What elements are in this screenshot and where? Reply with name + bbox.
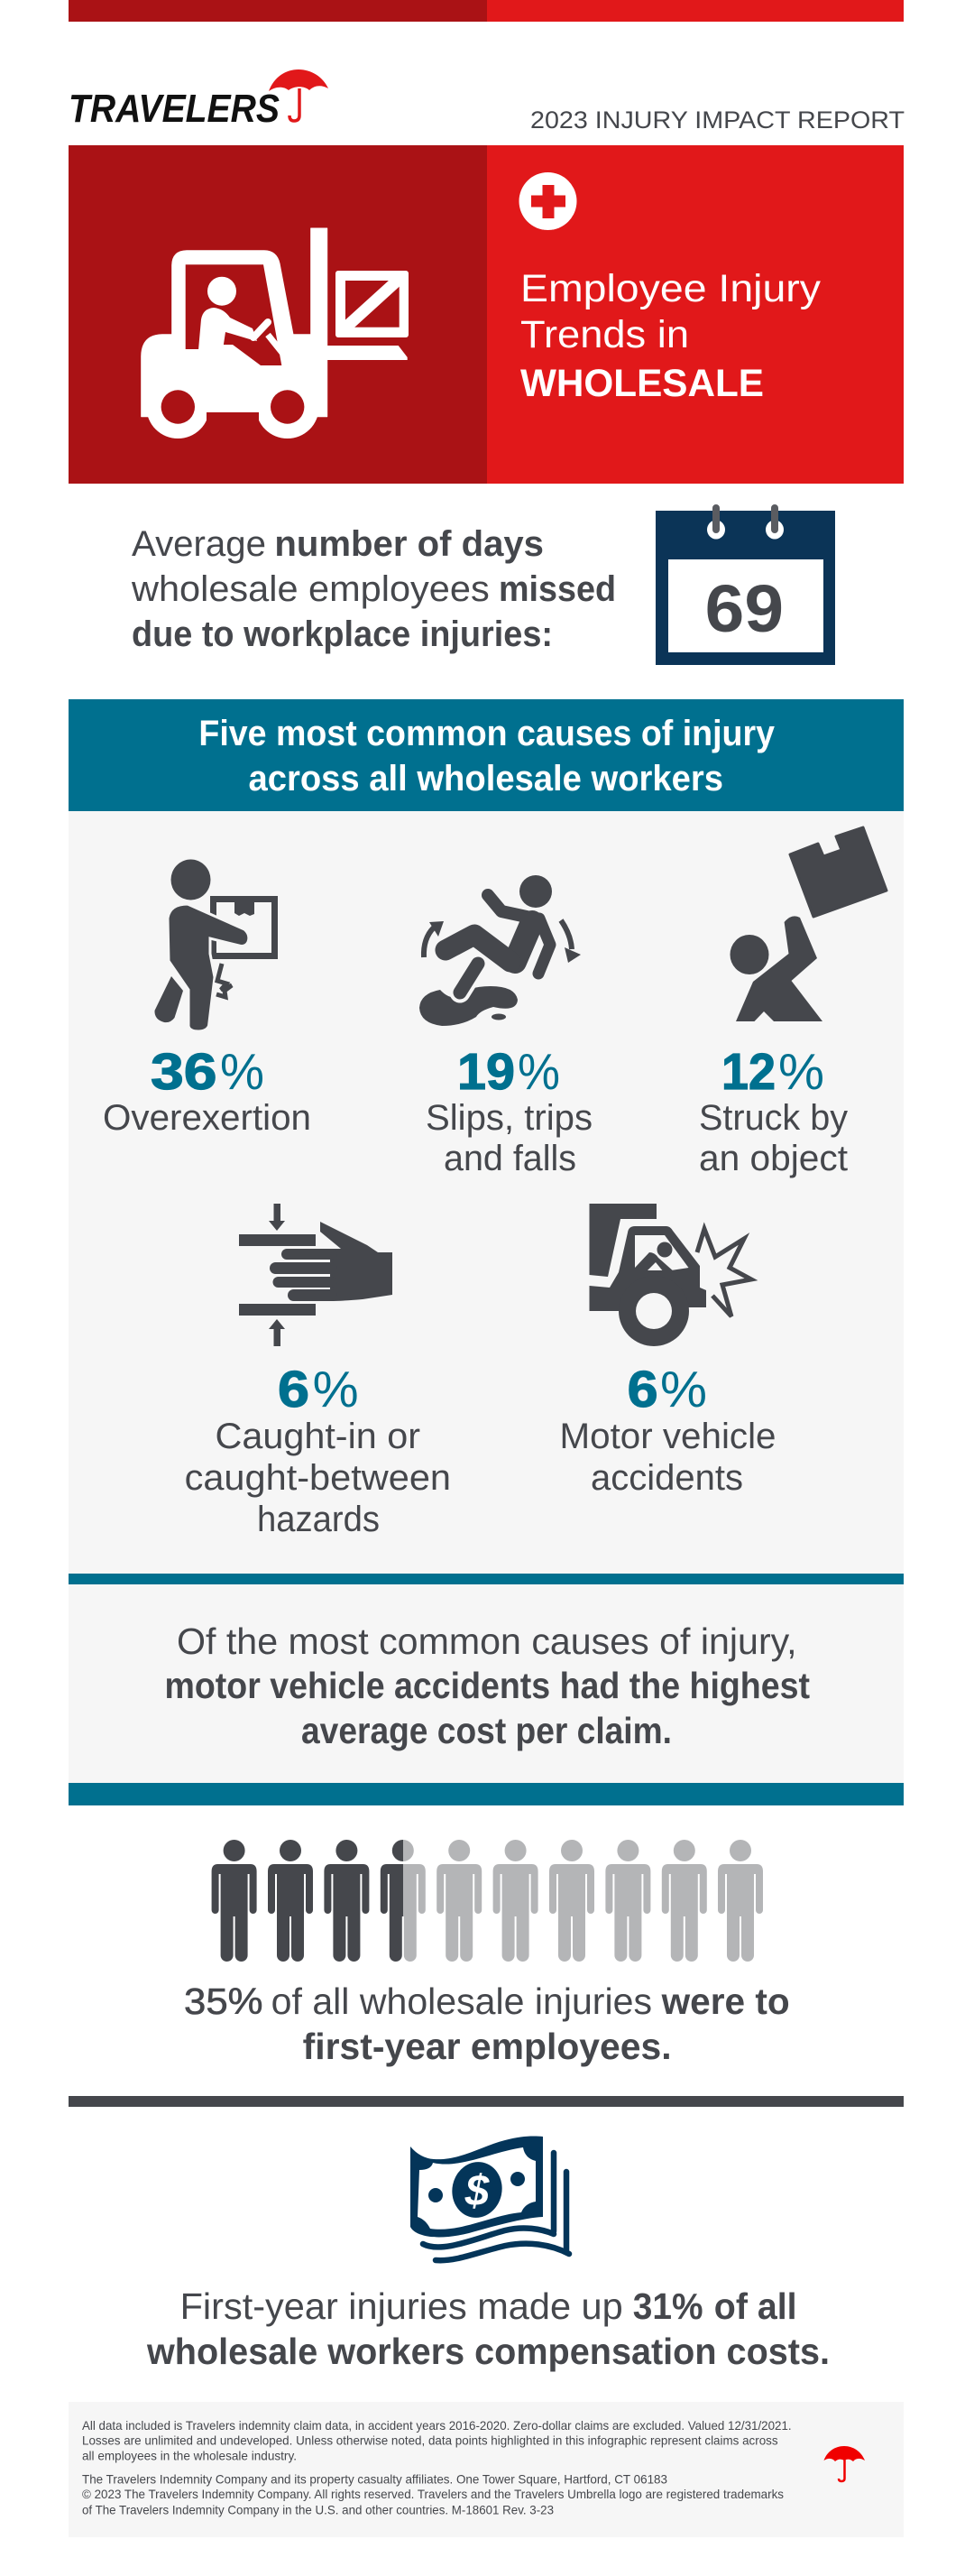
- first-year injury statement: [184, 1980, 790, 2067]
- icon: motor vehicle accident: [590, 1204, 751, 1346]
- person 10: [718, 1840, 763, 1962]
- person 9: [662, 1840, 707, 1962]
- stat: overexertion: 36: [151, 1043, 217, 1101]
- panel heading: Five most common causes of injury: [198, 714, 776, 753]
- stat: overexertion: %: [220, 1043, 264, 1101]
- stat: slips, trips and falls: 19: [457, 1043, 515, 1101]
- disclaimer text: all employees in the wholesale industry.: [82, 2449, 297, 2463]
- stat: overexertion: [103, 1043, 311, 1138]
- icon: slips, trips and falls: [419, 875, 581, 1026]
- stat: motor vehicle accidents: Motor vehicle: [559, 1417, 776, 1456]
- hero panel: [69, 145, 904, 484]
- person 8: [605, 1840, 650, 1962]
- compensation cost statement: of all: [714, 2285, 797, 2327]
- stat: struck by an object: [699, 1043, 848, 1178]
- panel heading: [69, 699, 904, 811]
- hero title: [520, 267, 822, 405]
- icon: red umbrella: [824, 2446, 865, 2481]
- first-year injury statement: were to: [661, 1980, 790, 2022]
- callout text: Of the most common causes of injury,: [177, 1620, 797, 1662]
- stat text: days missed: missed: [499, 569, 616, 609]
- disclaimer text: Losses are unlimited and undeveloped. Unless otherwise noted, data points highlighted in this infographic represent claims across: [82, 2433, 778, 2447]
- panel: highest average cost callout: [69, 1574, 904, 1805]
- report label: 2023 INJURY IMPACT REPORT: [530, 106, 905, 134]
- icon: forklift: [142, 228, 409, 439]
- top colour bar: [69, 0, 904, 22]
- compensation cost statement: First-year injuries made up: [180, 2285, 623, 2327]
- first-year injury statement: of all wholesale injuries: [271, 1980, 652, 2022]
- stat: caught-in hazards: 6: [278, 1361, 309, 1418]
- stat: slips, trips and falls: Slips, trips: [426, 1098, 593, 1138]
- stat: overexertion: Overexertion: [103, 1098, 311, 1138]
- icon: medical cross: [519, 172, 577, 230]
- icon: calendar 69: [656, 508, 835, 665]
- panel: five most common causes: [69, 699, 904, 1574]
- hero title: Trends in: [520, 313, 689, 356]
- divider bar: [69, 2096, 904, 2107]
- disclaimer text: [82, 2418, 792, 2517]
- stat: struck by an object: an object: [699, 1139, 848, 1178]
- compensation cost statement: wholesale workers compensation costs.: [146, 2331, 830, 2372]
- stat: struck by an object: Struck by: [699, 1098, 848, 1138]
- stat text: days missed: wholesale employees: [131, 569, 490, 609]
- stat: slips, trips and falls: [426, 1043, 593, 1178]
- person 3: [324, 1840, 369, 1962]
- hero title: Employee Injury: [520, 267, 822, 310]
- stat: motor vehicle accidents: [559, 1361, 776, 1498]
- first-year injury statement: 35%: [184, 1980, 263, 2022]
- disclaimer text: The Travelers Indemnity Company and its property casualty affiliates. One Tower Square, Hartford, CT 06183: [82, 2472, 667, 2487]
- stat: struck by an object: 12: [721, 1043, 776, 1101]
- pictogram: ten people, 35 percent highlighted: [212, 1840, 763, 1962]
- panel: footer disclaimer: [69, 2402, 904, 2537]
- icon: caught-in hand: [239, 1204, 392, 1346]
- stat: motor vehicle accidents: 6: [628, 1361, 658, 1418]
- icon: stack of money: [410, 2136, 569, 2260]
- disclaimer text: of The Travelers Indemnity Company in the U.S. and other countries. M-18601 Rev. 3-23: [82, 2503, 554, 2517]
- stat text: days missed: [131, 524, 616, 654]
- icon: stack of money: $: [464, 2167, 491, 2215]
- stat text: days missed: Average: [132, 524, 266, 564]
- person 1: [212, 1840, 257, 1962]
- hero title: WHOLESALE: [520, 362, 764, 405]
- stat: caught-in hazards: hazards: [257, 1500, 380, 1539]
- disclaimer text: All data included is Travelers indemnity claim data, in accident years 2016-2020. Zero-dollar claims are excluded. Valued 12/31/2021.: [82, 2418, 792, 2433]
- compensation cost statement: [146, 2285, 830, 2372]
- person 5: [436, 1840, 482, 1962]
- icon: overexertion: [154, 859, 274, 1031]
- callout text: [164, 1620, 810, 1751]
- Travelers logo: TRAVELERS: [69, 87, 280, 131]
- stat: caught-in hazards: caught-between: [185, 1458, 451, 1498]
- stat: caught-in hazards: [185, 1361, 451, 1539]
- callout text: motor vehicle accidents had the highest: [164, 1665, 810, 1706]
- stat: motor vehicle accidents: accidents: [591, 1458, 743, 1498]
- person 4 split: [381, 1840, 426, 1962]
- first-year injury statement: first-year employees.: [303, 2026, 672, 2067]
- person 6: [493, 1840, 538, 1962]
- disclaimer text: © 2023 The Travelers Indemnity Company. All rights reserved. Travelers and the Travelers Umbrella logo are registered trademarks: [82, 2487, 784, 2501]
- stat: slips, trips and falls: and falls: [444, 1139, 576, 1178]
- panel heading: across all wholesale workers: [249, 759, 723, 799]
- icon: calendar 69: 69: [705, 571, 784, 646]
- stat text: days missed: due to workplace injuries:: [132, 614, 553, 654]
- stat: motor vehicle accidents: %: [660, 1361, 707, 1418]
- icon: struck by an object: [730, 827, 887, 1021]
- compensation cost statement: 31%: [633, 2285, 703, 2327]
- stat: caught-in hazards: Caught-in or: [215, 1417, 420, 1456]
- stat: struck by an object: %: [778, 1043, 824, 1101]
- stat text: days missed: number of days: [274, 524, 544, 564]
- callout text: average cost per claim.: [301, 1710, 672, 1751]
- Travelers logo: [69, 69, 328, 131]
- stat: caught-in hazards: %: [313, 1361, 359, 1418]
- person 2: [268, 1840, 313, 1962]
- stat: slips, trips and falls: %: [518, 1043, 560, 1101]
- person 7: [549, 1840, 594, 1962]
